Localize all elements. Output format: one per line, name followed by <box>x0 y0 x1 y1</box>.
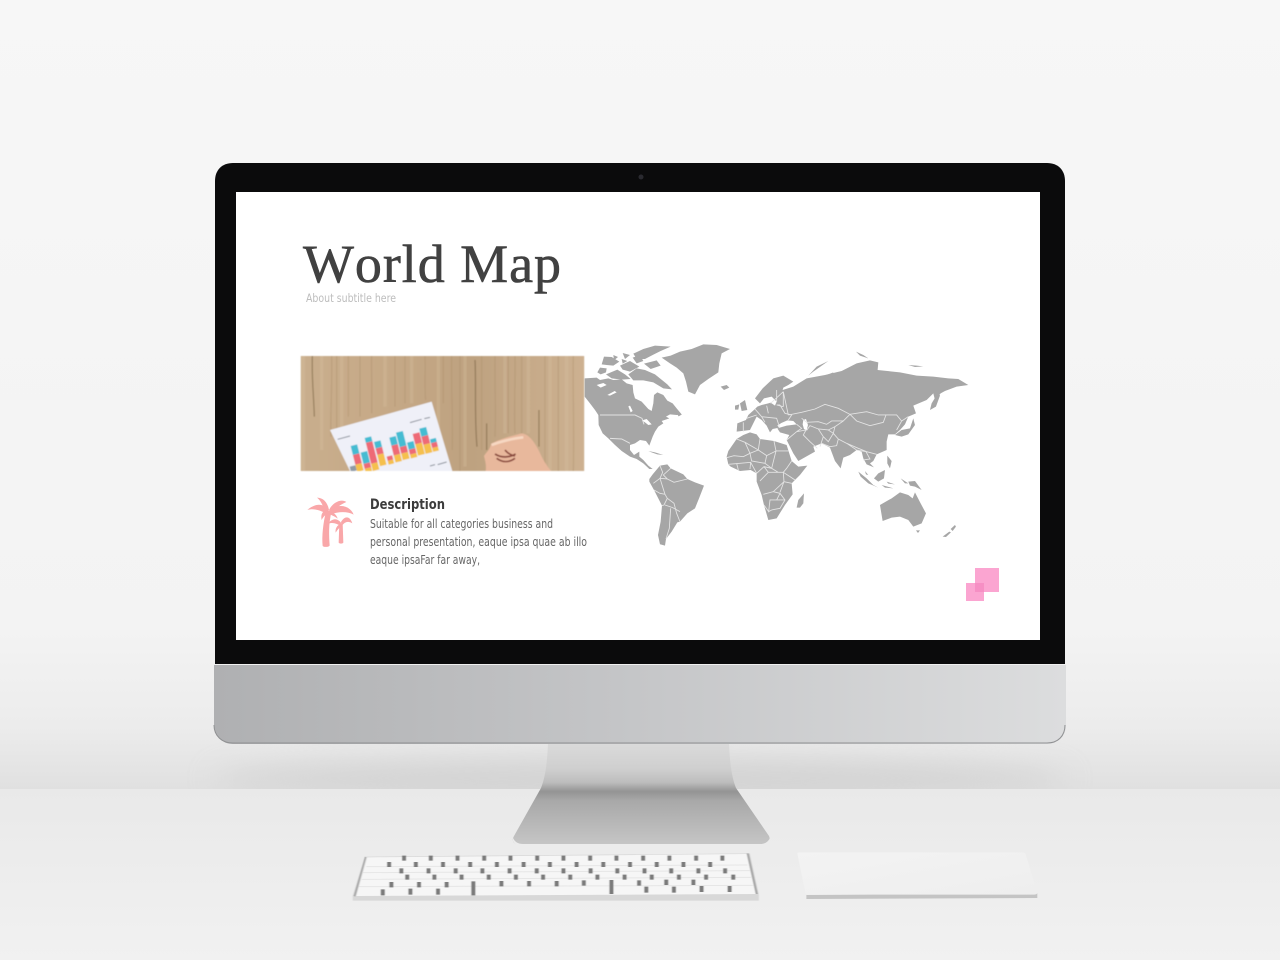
Australia and New Zealand <box>880 492 956 537</box>
heading: description: Description <box>370 497 445 513</box>
photo: chart on wooden desk <box>301 356 584 474</box>
Africa <box>727 432 807 520</box>
title: World Map <box>303 234 561 294</box>
body text: eaque ipsaFar far away, <box>370 553 480 567</box>
Iceland <box>721 385 729 390</box>
body text: Suitable for all categories business and <box>370 517 553 531</box>
Eurasia <box>735 352 968 468</box>
text block: description <box>370 497 587 567</box>
Southeast Asia and islands <box>858 456 922 490</box>
Greenland <box>662 344 730 394</box>
keyboard <box>353 853 759 901</box>
world map <box>585 344 968 546</box>
subtitle: About subtitle here <box>306 291 396 305</box>
fist <box>484 433 551 471</box>
icon: palm trees <box>307 498 354 547</box>
paper with bar chart <box>330 402 452 474</box>
screen <box>236 192 1040 640</box>
lakes and bays <box>597 383 652 425</box>
monitor stand <box>513 744 770 846</box>
body text: personal presentation, eaque ipsa quae ab illo <box>370 535 587 549</box>
monitor body <box>214 163 1066 744</box>
decorative pink squares <box>966 568 999 601</box>
US, Canada, Mexico borders <box>600 415 644 443</box>
trackpad <box>797 852 1037 899</box>
webcam <box>638 174 644 180</box>
South America <box>649 464 704 546</box>
body text <box>370 517 587 567</box>
North America <box>585 346 682 469</box>
